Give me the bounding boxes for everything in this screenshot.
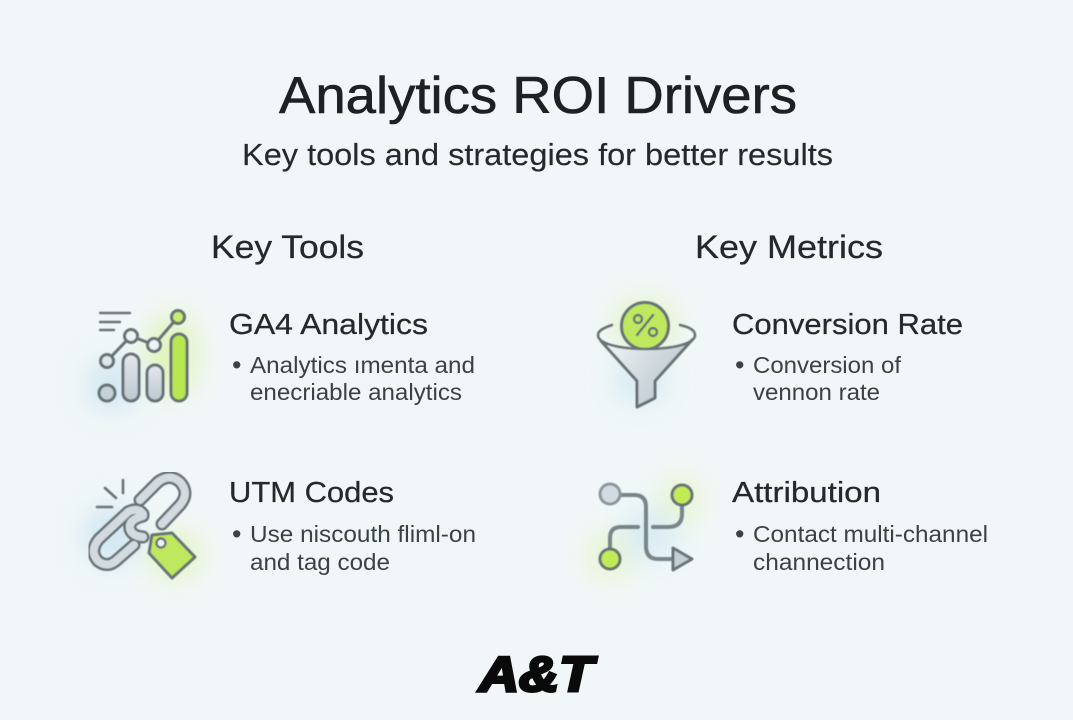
text block: UTM Codes: Use niscouth fliml-on xyxy=(250,521,476,547)
heading: key tools: Key Tools xyxy=(211,229,364,265)
text block: GA4 Analytics: GA4 Analytics xyxy=(229,309,428,341)
icon: attribution path xyxy=(590,478,700,577)
text block: Conversion Rate xyxy=(732,309,963,405)
text block: Conversion Rate: • xyxy=(735,350,744,380)
text block: GA4 Analytics: Analytics ımenta and xyxy=(250,352,475,378)
text block: UTM Codes: • xyxy=(232,519,241,549)
icon: link and tag xyxy=(84,478,199,578)
text block: Attribution: Contact multi-channel xyxy=(753,521,988,547)
text block: UTM Codes: UTM Codes xyxy=(229,477,394,509)
text block: Attribution: channection xyxy=(753,549,885,575)
text block: UTM Codes: and tag code xyxy=(250,549,390,575)
icon: analytics chart xyxy=(86,310,196,411)
icon: conversion funnel xyxy=(598,301,695,407)
text block: Attribution xyxy=(732,477,988,575)
text block: Conversion Rate: Conversion of xyxy=(753,352,902,378)
text block: Attribution: Attribution xyxy=(732,477,881,509)
text block: GA4 Analytics: • xyxy=(232,350,241,380)
heading: key metrics: Key Metrics xyxy=(695,229,883,265)
text block: Conversion Rate: vennon rate xyxy=(753,379,880,405)
text block: GA4 Analytics: enecriable analytics xyxy=(250,379,462,405)
title: Analytics ROI Drivers xyxy=(279,67,797,125)
subtitle: Key tools and strategies for better results xyxy=(242,137,833,172)
logo: A&T: A&T xyxy=(478,648,598,702)
text block: Attribution: • xyxy=(735,519,744,549)
text block: Conversion Rate: Conversion Rate xyxy=(732,309,963,341)
text block: UTM Codes xyxy=(229,477,476,575)
text block: GA4 Analytics xyxy=(229,309,475,405)
